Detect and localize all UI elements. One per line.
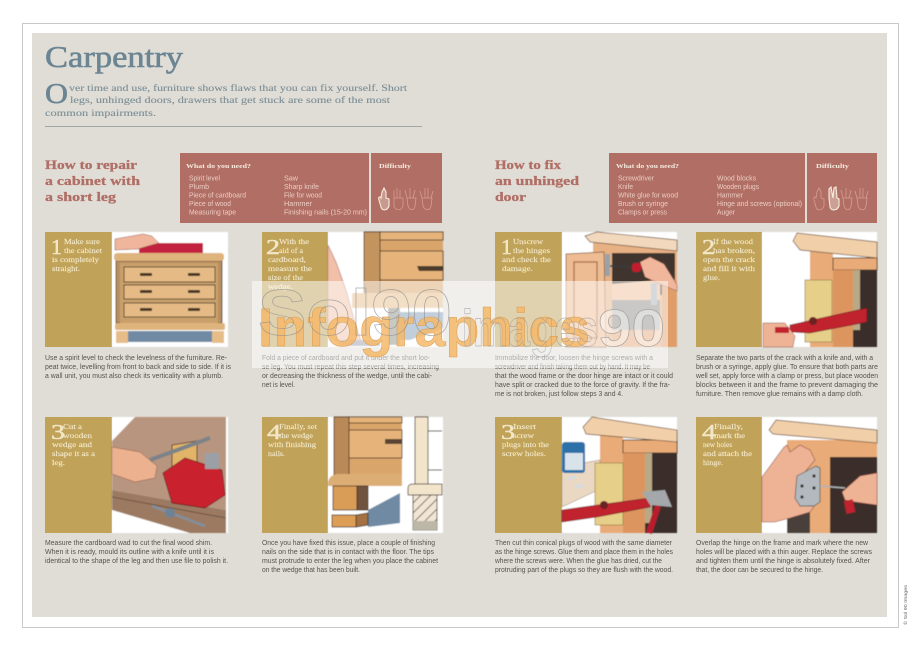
door step 1 text	[495, 355, 673, 398]
panel: what do you need, cabinet: Saw	[284, 176, 299, 182]
step 4: set the wedge: 4	[267, 420, 282, 444]
watermark: 90	[598, 300, 665, 358]
door step 2 text: brush or a syringe, apply glue. To ensure that both parts are	[696, 364, 878, 371]
panel: what do you need, cabinet: Plumb	[189, 184, 209, 191]
door step 2: glue the crack: open the crack	[703, 255, 755, 264]
door step 2 text: blocks between it and the frame to prevent damaging the	[696, 382, 878, 389]
step 2: measure the wedge: measure the	[268, 264, 313, 273]
door step 1 text: me is not broken, just follow steps 3 and 4.	[495, 391, 623, 398]
door step 3 text: as the hinge screws. Glue them and place them in the holes	[495, 549, 673, 556]
door step 2: glue the crack	[696, 232, 877, 347]
step 3: cut a wedge: Cut a	[63, 422, 83, 431]
panel: what do you need, door: Screwdriver	[618, 176, 655, 182]
illustration: clamped block on frame	[762, 232, 877, 347]
panel: what do you need, cabinet: Sharp knife	[284, 184, 319, 191]
step 1 text: Use a spirit level to check the levelness of the furniture. Re-	[45, 355, 228, 362]
step 3 text: identical to the shape of the leg and then use file to polish it.	[45, 558, 228, 565]
watermark	[252, 276, 668, 368]
door step 3 text: protruding part of the plugs so they are flush with the wood.	[495, 567, 673, 574]
door step 2 text	[695, 355, 878, 398]
step 2 text: net is level.	[262, 382, 295, 389]
panel: what do you need, cabinet: File for wood	[284, 192, 322, 200]
panel: what do you need, door: Auger	[717, 210, 736, 216]
door step 3: insert screw plugs: screw	[513, 431, 535, 440]
step 2: measure the wedge	[262, 232, 443, 347]
step 2 text: or decreasing the thickness of the wedge, until the cabi-	[262, 373, 433, 380]
step 3 text: Measure the cardboard wad to cut the final wood shim.	[45, 540, 212, 547]
heading: unhinged door: How to fix	[495, 157, 562, 172]
step 2 text: se leg. You must repeat this step several times, increasing	[262, 364, 439, 371]
step 3: cut a wedge: 3	[51, 420, 65, 444]
heading: cabinet repair: a cabinet with	[45, 173, 141, 188]
step 1 text: peat twice, levelling from front to back and side to side. If it is	[45, 364, 231, 371]
watermark: Sol90	[258, 276, 452, 349]
door step 2: glue the crack: and fill it with	[703, 264, 755, 273]
heading: unhinged door: an unhinged	[495, 173, 580, 188]
panel: what do you need, door: What do you need?	[616, 163, 679, 170]
step 4 text: nails on the side that is in contact with the floor. The tips	[262, 549, 434, 556]
step 1: level the cabinet: Make sure	[64, 237, 101, 246]
panel: what do you need, cabinet: Measuring tape	[189, 210, 236, 216]
door step 1: unscrew the hinges: the hinges	[513, 246, 550, 255]
door step 2: glue the crack: If the wood	[713, 237, 753, 246]
panel: what do you need, door: Knife	[618, 184, 633, 191]
door step 1 text: that the wood frame or the door hinge are intact or it could	[495, 373, 673, 380]
door step 3 text	[494, 540, 673, 574]
panel: difficulty, cabinet	[371, 153, 442, 223]
panel: what do you need, door: Wood blocks	[717, 176, 756, 182]
illustration: removing door hinges	[562, 232, 677, 347]
step 3: cut a wedge: wedge and	[52, 440, 92, 449]
step 4 text: on the wedge that has been built.	[262, 567, 360, 574]
panel: what do you need, door: Hammer	[717, 192, 744, 200]
step 3: cut a wedge: wooden	[63, 431, 92, 440]
door step 1 text: Immobilize the door, loosen the hinge screws with a	[495, 355, 653, 362]
door step 3: insert screw plugs: 3	[501, 420, 515, 444]
panel: what do you need, cabinet: Piece of cardboard	[189, 192, 246, 200]
door step 3 text: Then cut thin conical plugs of wood with the same diameter	[495, 540, 673, 547]
panel: what do you need, door: Clamps or press	[618, 210, 667, 216]
door step 4: attach the hinge: mark the	[714, 431, 746, 440]
step 4 text: Once you have fixed this issue, place a couple of finishing	[262, 540, 435, 547]
step 2 text: Fold a piece of cardboard and put it under the short loo-	[262, 355, 431, 362]
step 1: level the cabinet: 1	[51, 235, 62, 259]
panel: what do you need, door	[609, 153, 805, 223]
door step 1: unscrew the hinges: and check the	[502, 255, 552, 264]
step 2: measure the wedge: aid of a	[279, 246, 304, 255]
door step 3: insert screw plugs: plugs into the	[502, 440, 550, 449]
watermark: images	[462, 300, 598, 358]
panel: difficulty, cabinet: Difficulty	[379, 163, 412, 170]
door step 4: attach the hinge: 4	[702, 420, 717, 444]
door step 2: glue the crack: glue.	[703, 273, 720, 282]
step 2: measure the wedge: 2	[266, 235, 280, 259]
door step 1 text: have split or cracked due to the force of gravity. If the fra-	[495, 382, 671, 389]
heading: cabinet repair	[45, 157, 141, 204]
credit: © Sol 90 Images	[902, 584, 908, 625]
door step 4 text: holes will be placed with a thin auger. Replace the screws	[696, 549, 872, 556]
step 4: set the wedge	[262, 417, 443, 533]
step 3: cut a wedge	[45, 417, 228, 533]
illustration: glue, plugs, clamp, hammer	[562, 417, 677, 533]
door step 4: attach the hinge: Finally,	[714, 422, 743, 431]
door step 2: glue the crack: has broken,	[713, 246, 755, 255]
door step 1 text: screwdriver and finish taking them out by hand. It may be	[495, 364, 650, 371]
step 4: set the wedge: with finishing	[268, 440, 316, 449]
door step 4 text: and tighten them until the hinge is absolutely fixed. After	[696, 558, 871, 565]
step 3: cut a wedge: leg.	[52, 458, 65, 467]
door step 4: attach the hinge	[696, 417, 877, 533]
step 3: cut a wedge: shape it as a	[52, 449, 96, 458]
intro paragraph: common impairments.	[45, 108, 156, 119]
door step 3 text: where the screws were. When the glue has dried, cut the	[494, 558, 662, 565]
step 4: set the wedge: Finally, set	[279, 422, 318, 431]
step 2: measure the wedge: wedge.	[268, 282, 293, 291]
heading: unhinged door: door	[495, 189, 526, 204]
step 1: level the cabinet: straight.	[52, 264, 80, 273]
step 4: set the wedge: the wedge	[279, 431, 314, 440]
heading: unhinged door	[495, 157, 580, 204]
step 1 text	[45, 355, 231, 380]
panel: what do you need, door: White glue for wood	[618, 192, 678, 200]
door step 2: glue the crack: 2	[702, 235, 715, 259]
door step 3: insert screw plugs: Insert	[513, 422, 537, 431]
door step 3: insert screw plugs	[495, 417, 677, 533]
intro paragraph: ver time and use, furniture shows flaws that you can fix yourself. Short	[69, 83, 407, 94]
intro paragraph	[45, 78, 407, 119]
panel: difficulty, door: Difficulty	[816, 163, 850, 170]
step 1: level the cabinet: is completely	[52, 255, 99, 264]
title: Carpentry	[45, 39, 184, 74]
heading: cabinet repair: a short leg	[45, 189, 117, 204]
panel: what do you need, door: Brush or syringe	[618, 201, 668, 208]
panel: what do you need, cabinet: What do you need?	[186, 163, 251, 170]
panel: what do you need, cabinet: Piece of wood	[189, 201, 231, 208]
door step 4: attach the hinge: new holes	[703, 440, 732, 449]
door step 1: unscrew the hinges	[495, 232, 677, 347]
illustration: hands fixing hinge	[762, 417, 877, 533]
step 3 text	[45, 540, 228, 565]
illustration: wedge and leg section	[328, 417, 443, 533]
step 1: level the cabinet: the cabinet	[64, 246, 103, 255]
door step 3: insert screw plugs: screw holes.	[502, 449, 546, 458]
illustration: cabinet with spirit level	[112, 232, 228, 347]
door step 1: unscrew the hinges: Unscrew	[513, 237, 544, 246]
panel: what do you need, door: Hinge and screws (optional)	[717, 201, 802, 208]
panel: difficulty, door	[807, 153, 877, 223]
step 4: set the wedge: nails.	[268, 449, 285, 458]
panel: what do you need, cabinet	[180, 153, 369, 223]
door step 2 text: furniture. Then remove glue remains with a damp cloth.	[696, 391, 863, 398]
step 2: measure the wedge: cardboard,	[268, 255, 306, 264]
intro paragraph: O	[45, 78, 68, 110]
door step 4: attach the hinge: hinge.	[703, 458, 723, 467]
illustration: measuring the leg with cardboard	[328, 232, 443, 347]
step 2: measure the wedge: With the	[279, 237, 310, 246]
step 4 text	[262, 540, 438, 574]
intro paragraph: legs, unhinged doors, drawers that get stuck are some of the most	[70, 95, 390, 106]
step 2: measure the wedge: size of the	[268, 273, 304, 282]
step 4 text: must protrude to enter the leg when you place the cabinet	[262, 558, 438, 565]
panel: what do you need, cabinet: Hammer	[284, 201, 313, 208]
panel: what do you need, cabinet: Finishing nails (15-20 mm)	[284, 210, 367, 216]
panel: what do you need, door: Wooden plugs	[717, 184, 759, 191]
door step 4 text: that, the door can be secured to the hinge.	[696, 567, 823, 574]
panel: what do you need, cabinet: Spirit level	[189, 176, 220, 182]
door step 4 text	[696, 540, 872, 574]
door step 4 text: Overlap the hinge on the frame and mark where the new	[696, 540, 869, 547]
door step 1: unscrew the hinges: 1	[501, 235, 512, 259]
door step 2 text: well set, apply force with a clamp or press, but place wooden	[695, 373, 878, 380]
heading: cabinet repair: How to repair	[45, 157, 137, 172]
step 1: level the cabinet	[45, 232, 228, 347]
door step 1: unscrew the hinges: damage.	[502, 264, 533, 273]
step 2 text	[262, 355, 439, 389]
illustration: vise and file	[112, 417, 228, 533]
step 3 text: When it is ready, mould its outline with a knife until it is	[45, 549, 214, 556]
door step 4: attach the hinge: and attach the	[703, 449, 753, 458]
door step 2 text: Separate the two parts of the crack with a knife and, with a	[696, 355, 873, 362]
watermark: Infographics	[258, 298, 590, 358]
step 1 text: a wall unit, you must also check its verticality with a plumb.	[45, 373, 223, 380]
